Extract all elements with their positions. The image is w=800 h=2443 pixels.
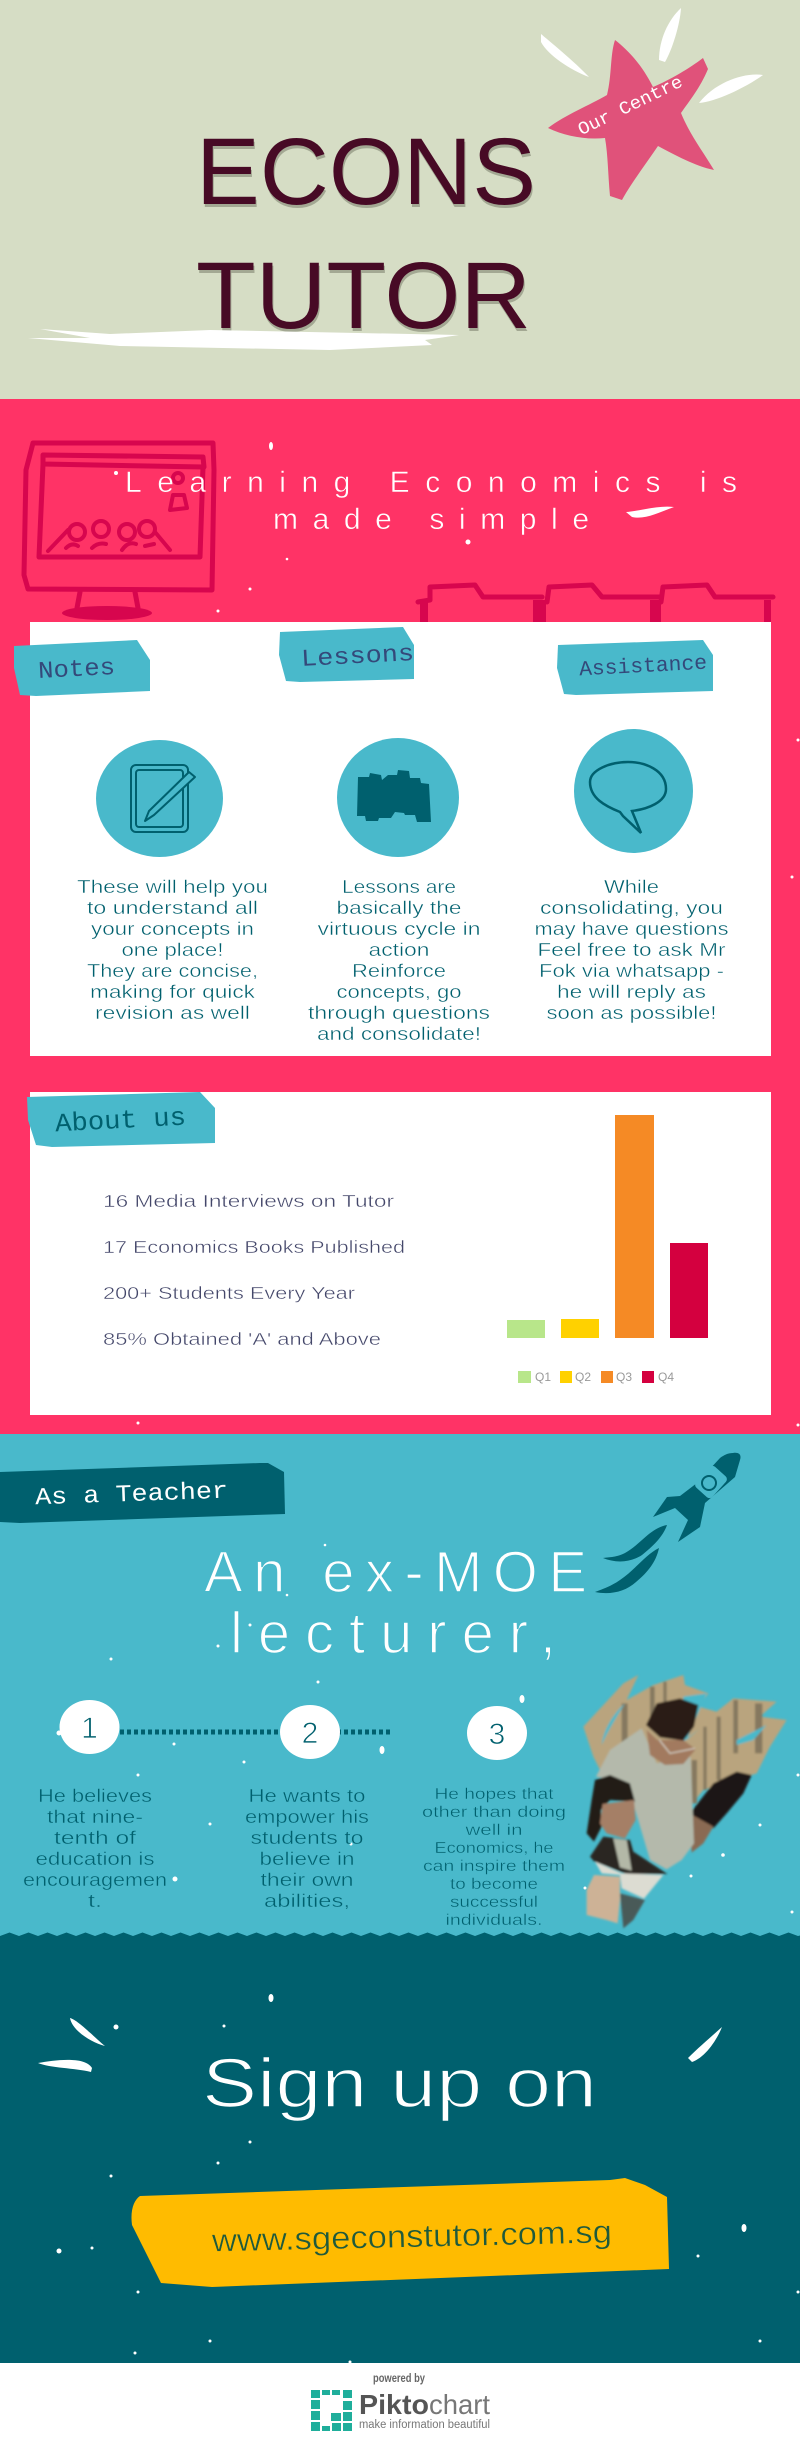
timeline steps	[60, 1700, 527, 1760]
text: assistance description: Fok via whatsapp -	[539, 961, 724, 981]
text: assistance description: While	[604, 877, 659, 897]
icon: monitor sketch	[24, 443, 214, 620]
text: step 1 description: He believes	[38, 1786, 152, 1806]
text: notes description: your concepts in	[91, 919, 254, 939]
text: step 3 description: well in	[464, 1822, 522, 1839]
list: statistics: 17 Economics Books Published	[103, 1237, 405, 1257]
text: notes description: These will help you	[77, 877, 268, 897]
text: lessons description: and consolidate!	[317, 1024, 481, 1044]
chart legend: Q3	[616, 1370, 632, 1384]
text: step 3 description: to become	[450, 1876, 538, 1893]
panel: services card	[14, 622, 771, 1056]
text: step 3 description: Economics, he	[434, 1840, 554, 1857]
heading: lecturer,	[230, 1601, 556, 1666]
list: statistics: 200+ Students Every Year	[103, 1283, 355, 1303]
panel: sign up	[0, 1932, 800, 2364]
wordmark: make information beautiful	[359, 2419, 490, 2431]
text: step 1 description	[23, 1786, 167, 1911]
tab: Assistance	[557, 640, 713, 695]
chart legend: Q1	[535, 1370, 551, 1384]
chart legend: Q4	[658, 1370, 674, 1384]
text: assistance description: may have questions	[534, 919, 728, 939]
wordmark	[359, 2389, 490, 2431]
text: assistance description: he will reply as	[557, 982, 706, 1002]
text: lessons description	[308, 877, 490, 1044]
icon: white brush strokes	[38, 2018, 722, 2072]
tab: As a Teacher	[0, 1463, 285, 1523]
title: ECONS	[196, 119, 536, 225]
text: step 3 description: can inspire them	[423, 1858, 565, 1875]
text: lessons description: through questions	[308, 1003, 490, 1023]
text: step 1 description: t.	[88, 1891, 102, 1911]
icon: white brush accent	[626, 507, 674, 518]
step 3: 3	[489, 1718, 505, 1751]
panel: about us card	[27, 1092, 771, 1415]
footer: piktochart branding	[0, 2363, 800, 2443]
icon: white brush underline	[28, 329, 459, 350]
text: step 1 description: education is	[36, 1849, 154, 1869]
text: notes description: to understand all	[87, 898, 258, 918]
tab: Notes	[14, 640, 150, 696]
chart legend	[518, 1370, 674, 1384]
step 3	[467, 1706, 527, 1760]
wordmark: Pikto	[359, 2389, 429, 2420]
title: TUTOR	[196, 243, 531, 349]
powered by: powered by	[373, 2373, 425, 2385]
text: notes description: one place!	[122, 940, 224, 960]
text: step 1 description: encouragemen	[23, 1870, 167, 1890]
heading	[125, 466, 737, 536]
tab: As a Teacher: As a Teacher	[35, 1479, 228, 1512]
text: step 2 description: believe in	[260, 1849, 354, 1869]
title: ECONS	[197, 122, 537, 228]
tab: Assistance: Assistance	[579, 653, 708, 682]
text: step 3 description: other than doing	[422, 1804, 566, 1821]
decorative dots	[56, 1994, 800, 2364]
tab: Lessons: Lessons	[301, 641, 415, 674]
text: step 2 description: empower his	[245, 1807, 369, 1827]
text: lessons description: concepts, go	[336, 982, 462, 1002]
panel: header	[0, 0, 800, 399]
step 1: 1	[81, 1712, 98, 1745]
text: step 2 description: He wants to	[248, 1786, 366, 1806]
decorative dots	[114, 442, 800, 1426]
panel: as a teacher	[0, 1434, 800, 1937]
step 2: 2	[302, 1717, 318, 1750]
step 1	[60, 1700, 120, 1754]
text: step 2 description: students to	[250, 1828, 364, 1848]
icon: speech bubble circle	[574, 729, 693, 853]
text: lessons description: Lessons are	[342, 877, 456, 897]
decorative dots	[56, 1544, 800, 1914]
text: lessons description: basically the	[336, 898, 462, 918]
text: step 2 description: their own	[260, 1870, 354, 1890]
text: step 1 description: tenth of	[54, 1828, 137, 1848]
tab: About us: About us	[54, 1103, 187, 1139]
heading: An ex-MOE	[204, 1540, 587, 1605]
icon: rocket	[595, 1453, 741, 1593]
text: step 2 description	[245, 1786, 369, 1911]
text: assistance description: consolidating, you	[540, 898, 723, 918]
call to action banner	[131, 2178, 669, 2287]
tab: About us	[27, 1092, 215, 1147]
heading: Learning Economics is	[125, 466, 737, 499]
text: step 3 description: He hopes that	[434, 1786, 554, 1803]
title: TUTOR	[197, 246, 532, 352]
chart legend: Q2	[575, 1370, 591, 1384]
tab: Notes: Notes	[37, 655, 116, 686]
icon: piktochart logo	[311, 2390, 352, 2431]
list: statistics: 16 Media Interviews on Tutor	[103, 1191, 394, 1211]
wordmark: chart	[429, 2389, 490, 2420]
text: notes description	[77, 877, 268, 1023]
text: step 3 description: individuals.	[446, 1912, 542, 1929]
text: step 3 description: successful	[450, 1894, 538, 1911]
list: statistics: 85% Obtained 'A' and Above	[103, 1329, 381, 1349]
photo: brush-masked teacher with student	[583, 1675, 787, 1928]
text: lessons description: action	[368, 940, 430, 960]
icon: notes circle	[96, 740, 223, 857]
panel: learning section	[0, 399, 800, 1434]
icon: folder sketches	[418, 585, 773, 624]
title	[196, 119, 537, 352]
icon: white brush strokes around star	[541, 8, 763, 103]
text: step 1 description: that nine-	[47, 1807, 143, 1827]
heading: made simple	[273, 503, 589, 536]
text: notes description: making for quick	[90, 982, 256, 1002]
text: assistance description	[534, 877, 728, 1023]
text: step 2 description: abilities,	[264, 1891, 350, 1911]
text: notes description: revision as well	[95, 1003, 250, 1023]
list: statistics	[103, 1191, 405, 1349]
text: assistance description: soon as possible!	[546, 1003, 716, 1023]
heading: Sign up on	[202, 2044, 597, 2122]
icon: star badge	[548, 40, 714, 200]
heading	[204, 1540, 587, 1666]
icon: lessons circle	[337, 738, 459, 857]
text: assistance description: Feel free to ask Mr	[538, 940, 726, 960]
tab: Lessons	[279, 627, 415, 682]
wave divider	[0, 1932, 800, 1940]
text: notes description: They are concise,	[87, 961, 258, 981]
text: step 3 description	[422, 1786, 566, 1929]
url: www.sgeconstutor.com.sg	[210, 2213, 612, 2259]
badge label: Our Centre	[575, 73, 686, 141]
text: lessons description: Reinforce	[352, 961, 446, 981]
bar chart	[507, 1115, 708, 1384]
text: lessons description: virtuous cycle in	[318, 919, 480, 939]
step 2	[280, 1705, 340, 1759]
